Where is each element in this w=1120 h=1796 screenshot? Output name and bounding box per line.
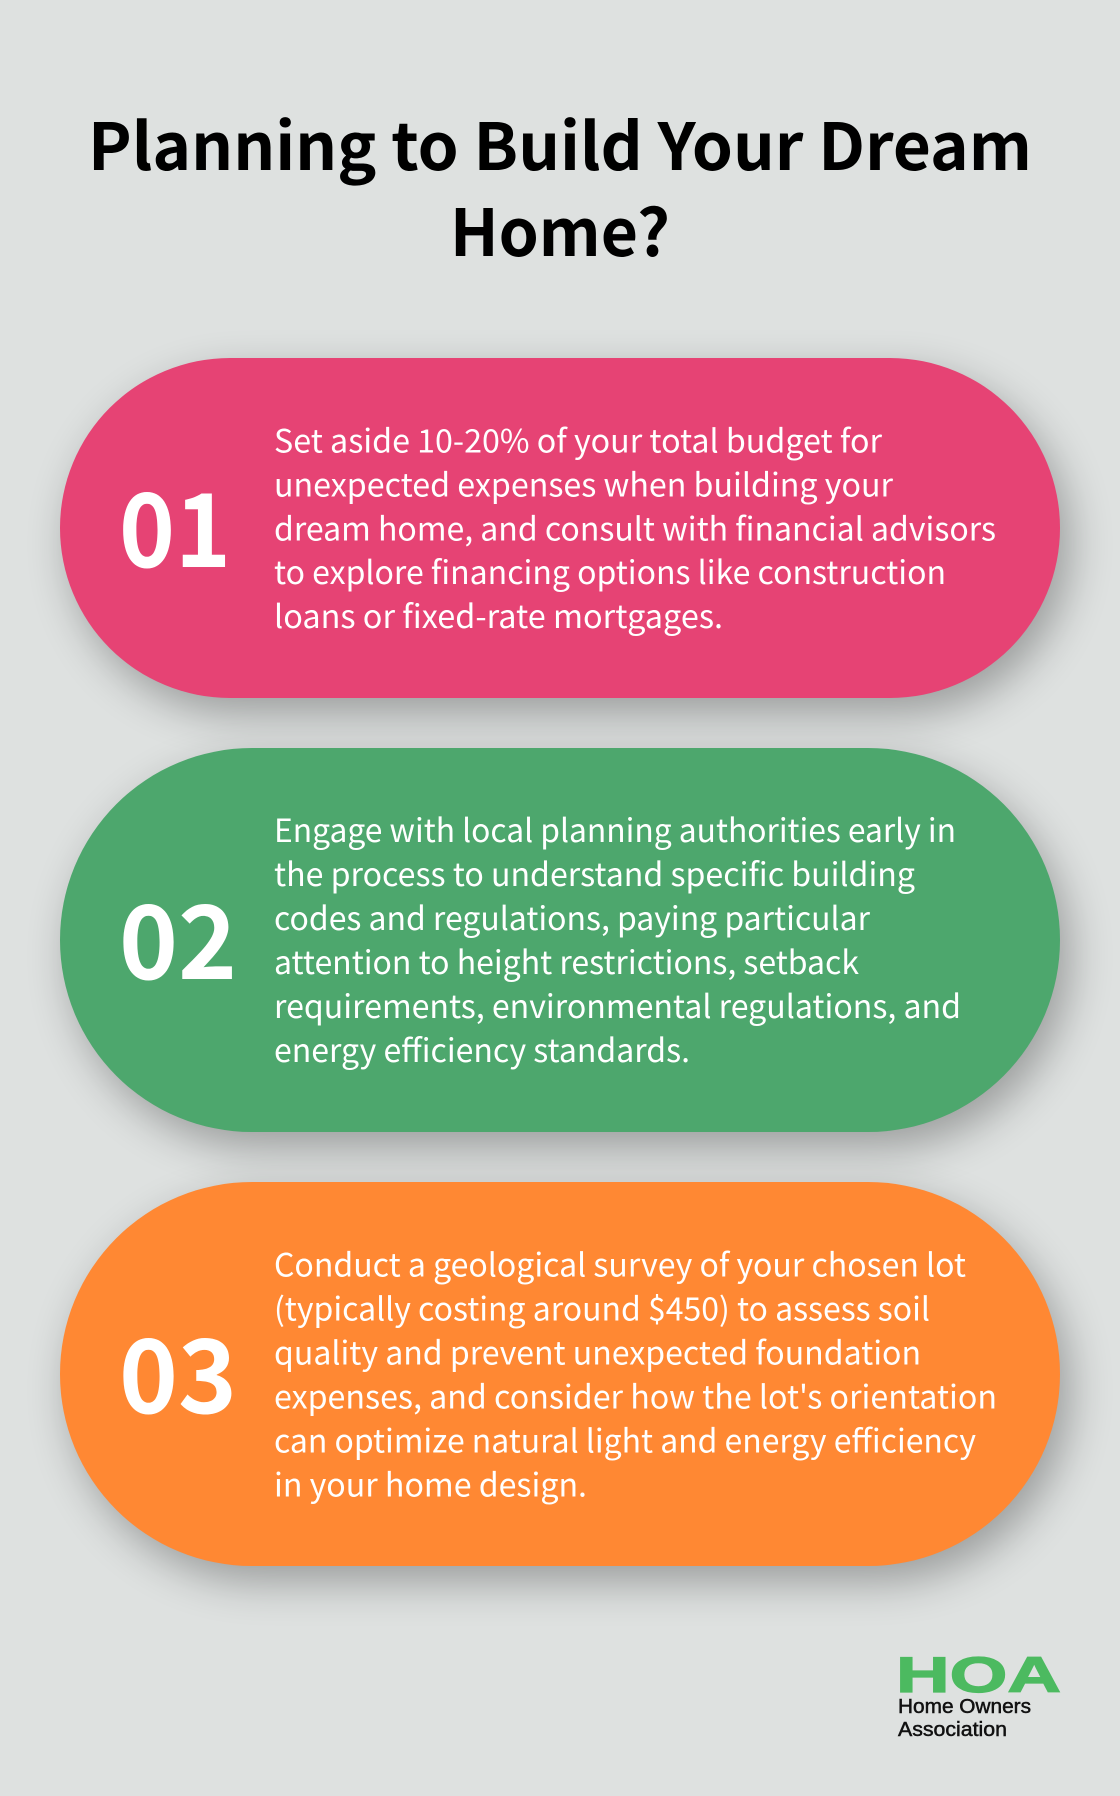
text block: regulations advice: [274, 806, 961, 1072]
text block: regulations advice: requirements, environmental regulations, and: [274, 982, 961, 1028]
title: [88, 95, 1032, 275]
text block: regulations advice: energy efficiency standards.: [274, 1026, 690, 1072]
number 02: 02: [119, 862, 237, 1009]
title: Planning to Build Your Dream: [88, 95, 1032, 189]
title: Home?: [450, 181, 670, 275]
text block: regulations advice: the process to understand specific building: [274, 850, 915, 896]
logo: HOA Home Owners Association: HOA: [896, 1647, 1061, 1703]
text block: survey advice: expenses, and consider how the lot's orientation: [274, 1372, 997, 1418]
text block: survey advice: quality and prevent unexpected foundation: [274, 1328, 921, 1374]
text block: survey advice: Conduct a geological survey of your chosen lot: [274, 1240, 966, 1286]
text block: budget advice: unexpected expenses when building your: [274, 460, 894, 506]
text block: budget advice: dream home, and consult with financial advisors: [274, 504, 996, 550]
text block: survey advice: [274, 1240, 997, 1506]
logo: HOA Home Owners Association: Association: [898, 1719, 1007, 1741]
logo: HOA Home Owners Association: [896, 1647, 1061, 1741]
text block: budget advice: to explore financing options like construction: [274, 548, 946, 594]
text block: survey advice: (typically costing around $450) to assess soil: [274, 1284, 930, 1330]
text block: budget advice: loans or fixed-rate mortgages.: [274, 592, 723, 638]
text block: budget advice: Set aside 10-20% of your total budget for: [274, 416, 883, 462]
number 01: 01: [119, 450, 231, 597]
text block: regulations advice: codes and regulations, paying particular: [274, 894, 871, 940]
panel: step 01 budget: [60, 358, 1060, 698]
logo: HOA Home Owners Association: Home Owners: [898, 1696, 1031, 1718]
text block: regulations advice: Engage with local planning authorities early in: [274, 806, 956, 852]
text block: budget advice: [274, 416, 996, 638]
text block: survey advice: can optimize natural light and energy efficiency: [274, 1416, 976, 1462]
text block: survey advice: in your home design.: [274, 1460, 587, 1506]
number 03: 03: [119, 1296, 237, 1443]
text block: regulations advice: attention to height restrictions, setback: [274, 938, 859, 984]
panel: step 02 regulations: [60, 748, 1060, 1132]
panel: step 03 lot survey: [60, 1182, 1060, 1566]
